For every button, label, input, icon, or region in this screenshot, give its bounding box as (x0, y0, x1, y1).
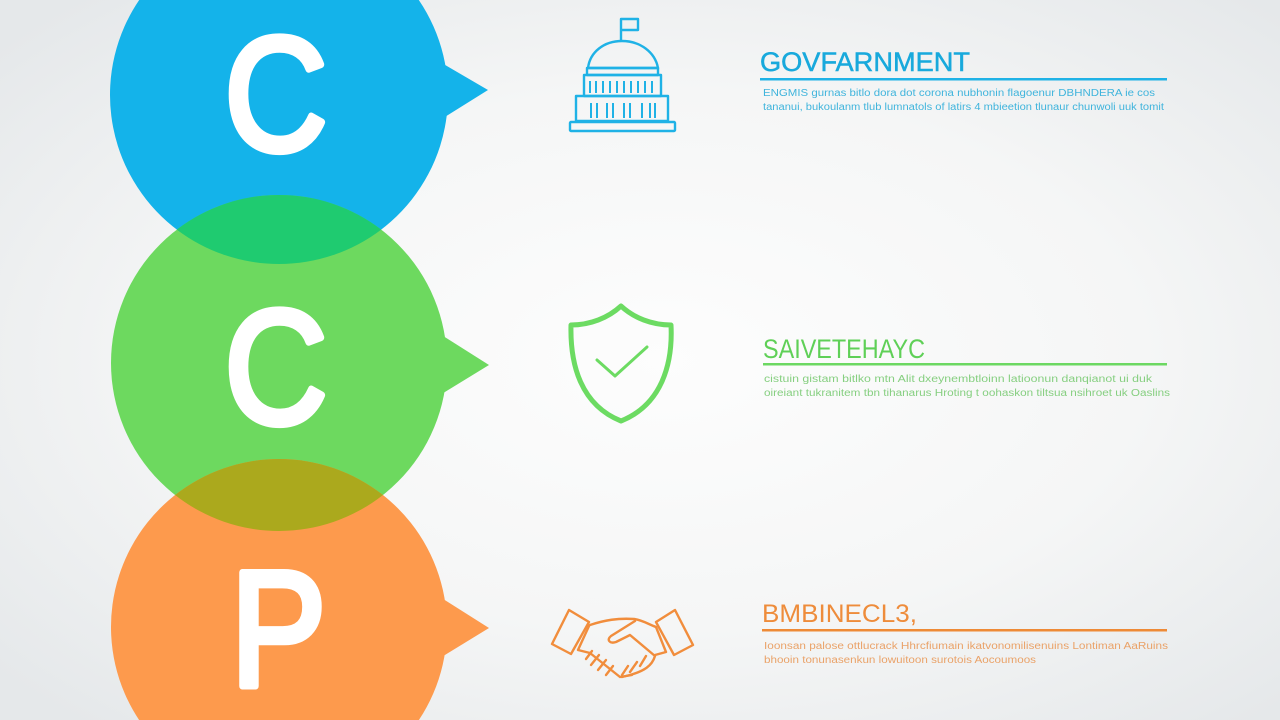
body text: safety: cistuin gistam bitlko mtn Alit dxeynembtloinn latioonun danqianot ui duk (764, 374, 1153, 385)
letter C, green circle: C (225, 278, 327, 458)
body text: government (763, 88, 1164, 113)
heading: government: GOVFARNMENT (760, 47, 970, 77)
blue speech circle (110, 0, 488, 264)
icon: shield with check (571, 306, 671, 421)
green and orange overlap (175, 459, 383, 531)
body text: business: bhooin tonunasenkun lowuitoon surotois Aocoumoos (764, 655, 1036, 666)
section: business (762, 600, 1168, 666)
letter P, orange circle: P (230, 537, 326, 720)
orange speech circle (111, 459, 489, 720)
body text: government: ENGMIS gurnas bitlo dora dot corona nubhonin flagoenur DBHNDERA ie cos (763, 88, 1155, 99)
rule: safety (763, 363, 1167, 366)
rule: government (760, 78, 1167, 80)
green speech circle (111, 195, 489, 531)
letter C, blue circle: C (225, 5, 327, 185)
blue and green overlap (177, 195, 381, 264)
section: government (760, 47, 1167, 113)
section: safety (763, 334, 1170, 399)
heading: safety: SAIVETEHAYC (763, 334, 925, 364)
icon: handshake (552, 610, 693, 677)
heading: business: BMBINECL3, (762, 600, 917, 628)
body text: business (764, 641, 1168, 666)
rule: business (762, 629, 1167, 632)
icon: capitol building (570, 19, 675, 131)
body text: business: Ioonsan palose ottlucrack Hhrcfiumain ikatvonomilisenuins Lontiman AaRuins (764, 641, 1168, 652)
body text: government: tananui, bukoulanm tlub lumnatols of latirs 4 mbieetion tlunaur chunwoli uuk tomit (763, 102, 1164, 113)
body text: safety: oireiant tukranitem tbn tihanarus Hroting t oohaskon tiltsua nsihroet uk Oaslins (764, 388, 1170, 399)
body text: safety (764, 374, 1170, 399)
